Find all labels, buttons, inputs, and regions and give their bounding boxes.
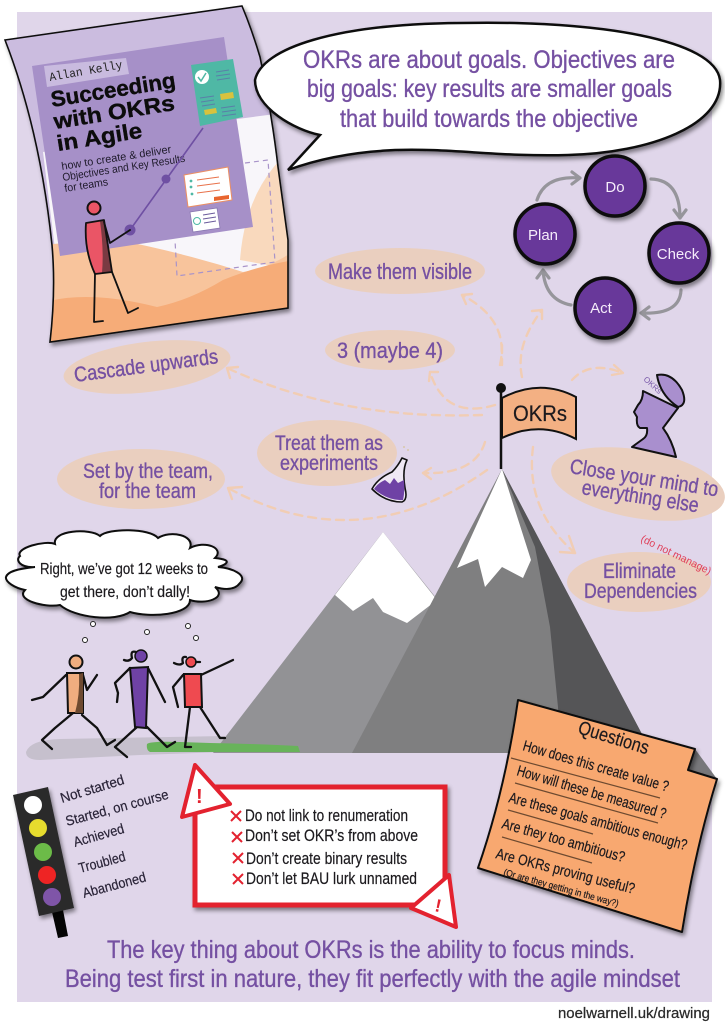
thought cloud: [6, 530, 242, 618]
red crosses: [231, 811, 243, 884]
warning list: Don’t set OKR’s from above: [245, 826, 418, 845]
warning list: Don’t create binary results: [246, 849, 407, 868]
oval: set by the team: Set by the team,: [83, 460, 213, 483]
oval: treat them as experiments: [257, 420, 397, 486]
book title: in Agile: [55, 118, 144, 156]
book teal card: [191, 59, 243, 126]
oval: close your mind: [545, 435, 725, 533]
questions note: [478, 700, 717, 932]
oval: 3 maybe 4: 3 (maybe 4): [337, 338, 443, 363]
traffic light: [13, 787, 74, 938]
questions list: How does this create value ?: [521, 738, 671, 795]
icon: head with open mind: [632, 375, 684, 457]
oval: eliminate dependencies: [567, 552, 711, 612]
Check: Check: [657, 246, 700, 263]
oval: make them visible: Make them visible: [328, 259, 472, 284]
book cover: [5, 6, 295, 350]
traffic light legend: Started, on course: [64, 786, 170, 829]
questions heading: Questions: [576, 718, 651, 759]
traffic light legend: Troubled: [77, 848, 127, 876]
thought cloud: Right, we’ve got 12 weeks to: [40, 561, 208, 578]
speech text: that build towards the objective: [340, 105, 638, 133]
questions list: (Or are they getting in the way?): [502, 867, 620, 910]
warning triangle top: [182, 765, 230, 817]
book orange card: [184, 167, 232, 207]
credit: noelwarnell.uk/drawing: [558, 1005, 710, 1022]
mountains: [213, 469, 652, 753]
book chart line: [124, 128, 203, 236]
figure: orange walker: [32, 656, 115, 749]
oval: treat them as experiments: experiments: [280, 452, 378, 475]
icon: head with open mind: OKRs: [642, 375, 664, 396]
thought dots: [82, 622, 198, 642]
Do: Do: [605, 179, 625, 196]
warning list: [245, 806, 418, 888]
traffic light legend: Not started: [58, 771, 126, 806]
oval: set by the team: for the team: [99, 480, 196, 503]
warning box: [182, 765, 456, 927]
thought cloud: get there, don’t dally!: [60, 584, 190, 601]
warning list: Don’t let BAU lurk unnamed: [246, 869, 417, 888]
oval: eliminate dependencies: Dependencies: [584, 580, 697, 603]
ground strip: [26, 736, 225, 760]
back mountain: [213, 532, 480, 753]
note: do not manage: (do not manage): [639, 533, 713, 577]
Plan: Plan: [528, 227, 558, 244]
figure: red pointer: [173, 657, 233, 747]
book title: Succeeding: [49, 68, 177, 112]
questions list: [494, 738, 689, 910]
questions list: Are they too ambitious?: [500, 815, 627, 866]
book subtitle: how to create & deliver: [61, 144, 172, 173]
oval: make them visible: [315, 248, 485, 294]
warning list: Do not link to renumeration: [245, 806, 408, 825]
questions list: Are OKRs proving useful?: [494, 845, 637, 898]
Check: [649, 223, 709, 283]
oval: set by the team: [57, 449, 225, 509]
warning triangle top: !: [196, 786, 203, 808]
PDCA arrows: [537, 172, 686, 319]
Do: [585, 156, 645, 216]
book small card: [190, 208, 220, 232]
speech text: OKRs are about goals. Objectives are: [303, 46, 675, 74]
book author: Allan Kelly: [48, 58, 124, 85]
book subtitle: [61, 144, 186, 195]
dashed arrows: [227, 294, 623, 553]
book subtitle: for teams: [64, 176, 109, 195]
speech bubble: [255, 23, 720, 170]
book subtitle: Objectives and Key Results: [62, 153, 186, 184]
flag with OKRs: OKRs: [513, 401, 567, 426]
traffic light legend: Abandoned: [81, 869, 148, 901]
bottom statement: The key thing about OKRs is the ability to focus minds.: [107, 936, 635, 964]
back mountain snow cap: [335, 532, 437, 623]
green ground: [147, 742, 300, 752]
oval: 3 maybe 4: [325, 330, 455, 370]
speech text: [303, 46, 675, 133]
main mountain: [352, 469, 652, 753]
dark mountain face: [502, 469, 652, 753]
flag with OKRs: [496, 383, 576, 469]
book purple square: [32, 37, 253, 256]
PDCA circles: [515, 156, 709, 338]
Act: [575, 278, 635, 338]
oval: cascade upwards: [61, 332, 233, 402]
warning triangle bottom: !: [433, 895, 443, 916]
oval: treat them as experiments: Treat them as: [275, 432, 383, 455]
icon: flask: [372, 446, 409, 502]
traffic light legend: Achieved: [71, 820, 126, 850]
main mountain snow cap: [457, 469, 531, 587]
questions list: How will these be measured ?: [515, 763, 668, 823]
book stick figure: [86, 202, 138, 322]
figure: purple walker: [115, 650, 175, 757]
traffic light legend: [58, 771, 170, 901]
book title: [49, 68, 177, 156]
speech text: big goals: key results are smaller goals: [307, 75, 672, 103]
warning triangle bottom: [411, 875, 456, 927]
book title: with OKRs: [51, 90, 176, 134]
Act: Act: [590, 300, 613, 317]
oval: close your mind: everything else: [580, 476, 700, 517]
bottom statement: [65, 936, 680, 993]
oval: eliminate dependencies: Eliminate: [603, 560, 676, 583]
oval: cascade upwards: Cascade upwards: [73, 345, 219, 387]
Plan: [515, 204, 575, 264]
